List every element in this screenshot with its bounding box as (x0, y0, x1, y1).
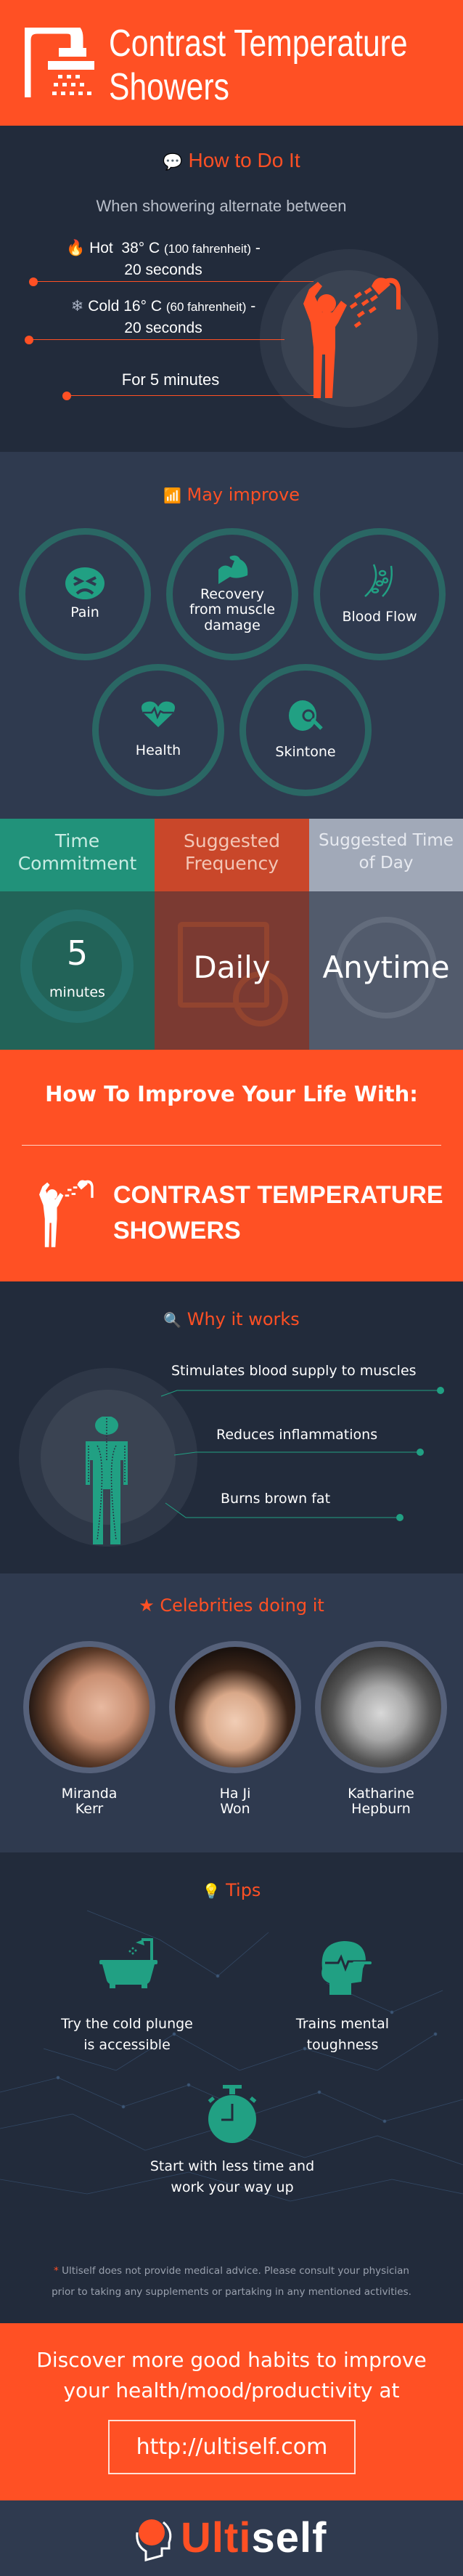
reason 1 (161, 1363, 444, 1396)
logo: Ultiself (181, 2514, 327, 2561)
panel: stats (0, 819, 463, 1050)
line: duration (62, 392, 314, 400)
benefit: skintone: Skintone (275, 744, 336, 760)
icon: pain face (65, 567, 105, 599)
item: hot: 🔥 Hot 38° C (100 fahrenheit) - (66, 240, 261, 256)
celebrity: katharine hepburn: Katharine (348, 1786, 414, 1802)
icon: brain head (136, 2519, 171, 2561)
stat: time of day: of Day (359, 854, 413, 872)
benefit: recovery: Recovery (200, 586, 264, 602)
heading: may improve: 📶 May improve (163, 485, 300, 505)
reason 2 (174, 1427, 424, 1456)
benefit: recovery: from muscle (189, 602, 275, 617)
stat: time commitment: minutes (49, 984, 105, 1000)
reason 3: Burns brown fat (221, 1491, 330, 1507)
stat: time of day: Suggested Time (319, 831, 454, 850)
stat: frequency (155, 819, 309, 1050)
tip: start small (150, 2085, 314, 2195)
benefit: pain (19, 528, 151, 660)
stat: time commitment: 5 (67, 933, 88, 973)
reason 2: Reduces inflammations (216, 1427, 377, 1443)
item: cold: 20 seconds (124, 320, 202, 336)
tip: mental toughness: Trains mental (296, 2016, 389, 2032)
benefit: recovery: damage (204, 617, 261, 633)
tip: cold plunge: is accessible (83, 2037, 171, 2053)
cta text: Discover more good habits to improve (36, 2348, 427, 2372)
reason 1: Stimulates blood supply to muscles (171, 1363, 417, 1379)
stat: time commitment (0, 819, 155, 1050)
banner heading: How To Improve Your Life With: (45, 1082, 418, 1106)
title: Showers (109, 66, 229, 108)
stat: time of day (309, 819, 463, 1050)
icon: heart pulse (142, 702, 175, 727)
icon: bathtub (99, 1938, 157, 1988)
line: cold (25, 336, 284, 344)
benefit: recovery (166, 528, 298, 660)
celebrity: miranda kerr: Miranda (62, 1786, 117, 1802)
icon: head with pulse (321, 1941, 372, 1995)
icon: human body (86, 1417, 128, 1544)
heading: tips: 💡 Tips (202, 1880, 261, 1900)
item: duration: For 5 minutes (122, 370, 219, 389)
tip: start small: work your way up (171, 2179, 294, 2195)
panel: how to do it (0, 126, 463, 452)
header banner (0, 0, 463, 126)
line: hot (29, 278, 314, 286)
icon: blood vessel (364, 564, 393, 597)
panel: may improve (0, 452, 463, 819)
tip: cold plunge: Try the cold plunge (61, 2016, 193, 2032)
item: hot (66, 239, 261, 278)
stat: time commitment: Commitment (18, 853, 136, 874)
banner title: SHOWERS (113, 1217, 241, 1244)
url button (108, 2420, 356, 2474)
icon: shower (25, 28, 94, 97)
banner: how to improve (0, 1050, 463, 1281)
item: cold: ❄ Cold 16° C (60 fahrenheit) - (71, 298, 255, 315)
item: hot: 20 seconds (124, 262, 202, 278)
celebrity: miranda kerr: Kerr (75, 1801, 103, 1817)
stat: frequency: Frequency (185, 853, 279, 874)
panel: tips (0, 1852, 463, 2237)
stat: frequency: Suggested (184, 830, 280, 851)
banner title: CONTRAST TEMPERATURE (113, 1181, 443, 1209)
stat: frequency: Daily (193, 949, 271, 985)
tip: mental toughness: toughness (307, 2037, 378, 2053)
heading: why it works: 🔍 Why it works (163, 1309, 300, 1329)
tip: cold plunge (61, 1938, 193, 2053)
benefit: blood flow (314, 528, 446, 660)
item: cold (71, 298, 255, 336)
disclaimer (0, 2237, 463, 2323)
disclaimer: prior to taking any supplements or partaking in any mentioned activities. (52, 2286, 411, 2298)
tip: start small: Start with less time and (150, 2158, 314, 2174)
panel: celebrities (0, 1573, 463, 1852)
intro text: When showering alternate between (97, 197, 346, 215)
disclaimer: * Ultiself does not provide medical advice. Please consult your physician (54, 2265, 409, 2277)
benefit: skintone (239, 664, 372, 796)
cta text: your health/mood/productivity at (63, 2378, 400, 2402)
benefit: blood flow: Blood Flow (342, 609, 417, 625)
heading: celebrities: ★ Celebrities doing it (139, 1595, 324, 1616)
celebrity: katharine hepburn (315, 1641, 447, 1817)
figure circle (260, 249, 438, 428)
icon: person showering (303, 278, 401, 398)
benefit: health: Health (136, 742, 181, 758)
title: Contrast Temperature (109, 23, 408, 65)
icon: person showering white (39, 1180, 94, 1247)
reason 3 (165, 1491, 403, 1521)
stat: time commitment: Time (55, 830, 99, 851)
heading: how to do it: 💬 How to Do It (163, 149, 300, 171)
celebrity: ha ji won: Won (220, 1801, 250, 1817)
cta text (36, 2348, 427, 2402)
body circle (19, 1368, 197, 1547)
celebrity: miranda kerr (23, 1641, 155, 1817)
benefit: health (92, 664, 224, 796)
benefit: pain: Pain (70, 604, 99, 620)
stat: time of day: Anytime (322, 949, 450, 985)
footer (0, 2500, 463, 2576)
url button: http://ultiself.com (136, 2434, 327, 2460)
call to action (0, 2323, 463, 2500)
icon: face with magnifier (289, 700, 323, 731)
celebrity: ha ji won (169, 1641, 301, 1817)
celebrity: ha ji won: Ha Ji (220, 1786, 250, 1802)
banner title (113, 1181, 443, 1244)
icon: stopwatch (208, 2085, 257, 2143)
tip: mental toughness (296, 1941, 389, 2053)
celebrity: katharine hepburn: Hepburn (351, 1801, 411, 1817)
panel: why it works (0, 1281, 463, 1573)
icon: muscle arm (218, 555, 248, 584)
title (109, 23, 408, 108)
